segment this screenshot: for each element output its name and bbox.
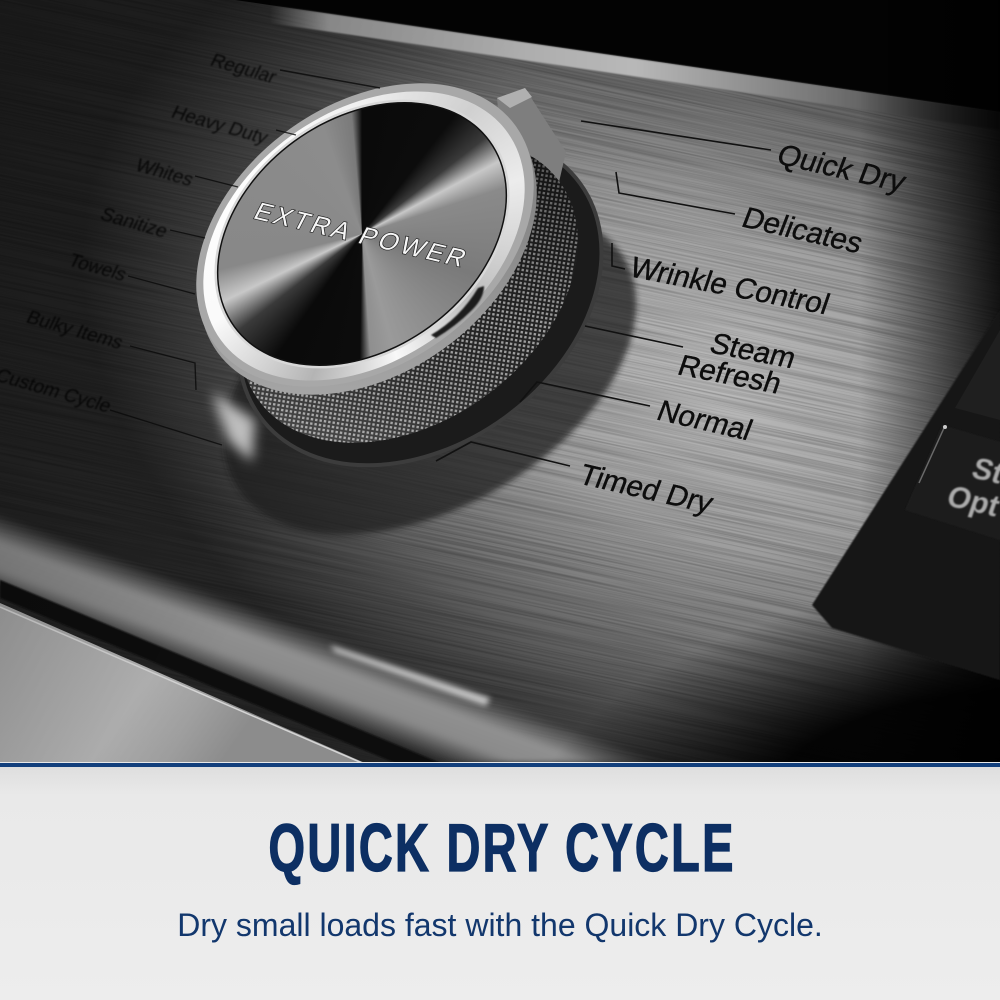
chrome pointer: [497, 88, 566, 195]
dark button panel: [812, 310, 1000, 680]
cycle labels right: Refresh: [674, 349, 786, 400]
subtitle: Dry small loads fast with the Quick Dry Cycle.: [177, 907, 823, 943]
vignette: [0, 0, 1000, 763]
dial skirt: [175, 66, 665, 534]
cycle labels left: Heavy Duty: [168, 103, 272, 149]
knurled dial side: [182, 76, 636, 506]
photo: washer control dial panel: [0, 0, 1000, 762]
title: QUICK DRY CYCLE: [268, 810, 736, 886]
cycle labels left: Towels: [65, 251, 130, 286]
cycle labels right: Delicates: [737, 202, 868, 260]
cycle labels left: Sanitize: [97, 205, 171, 242]
cycle labels right: Timed Dry: [574, 459, 718, 520]
cycle labels right: Quick Dry: [772, 139, 911, 199]
rounded front lip of panel: [0, 485, 800, 763]
caption band: [0, 767, 1000, 1000]
dial face: [0, 0, 1000, 763]
blue divider stripe: [0, 762, 1000, 767]
dial cast shadow: [168, 143, 692, 601]
light reflection on panel: [212, 392, 255, 462]
dark groove under lip: [0, 580, 440, 763]
cycle leader lines left: [110, 70, 380, 445]
cycle labels right: Normal: [652, 395, 757, 447]
cycle labels left: [0, 51, 281, 417]
cycle labels left: Regular: [207, 51, 281, 88]
dial label: EXTRA POWER: [249, 198, 474, 273]
steel panel: [0, 0, 1000, 763]
cycle labels left: Bulky Items: [23, 308, 126, 354]
chrome ring: [0, 0, 1000, 763]
cycle labels left: Whites: [132, 156, 197, 191]
cycle leader lines right: [436, 121, 771, 466]
cycle labels right: Steam: [706, 327, 800, 375]
cycle labels right: Wrinkle Control: [626, 251, 834, 321]
lower washer body: [0, 603, 365, 763]
cycle labels right: [574, 139, 911, 520]
